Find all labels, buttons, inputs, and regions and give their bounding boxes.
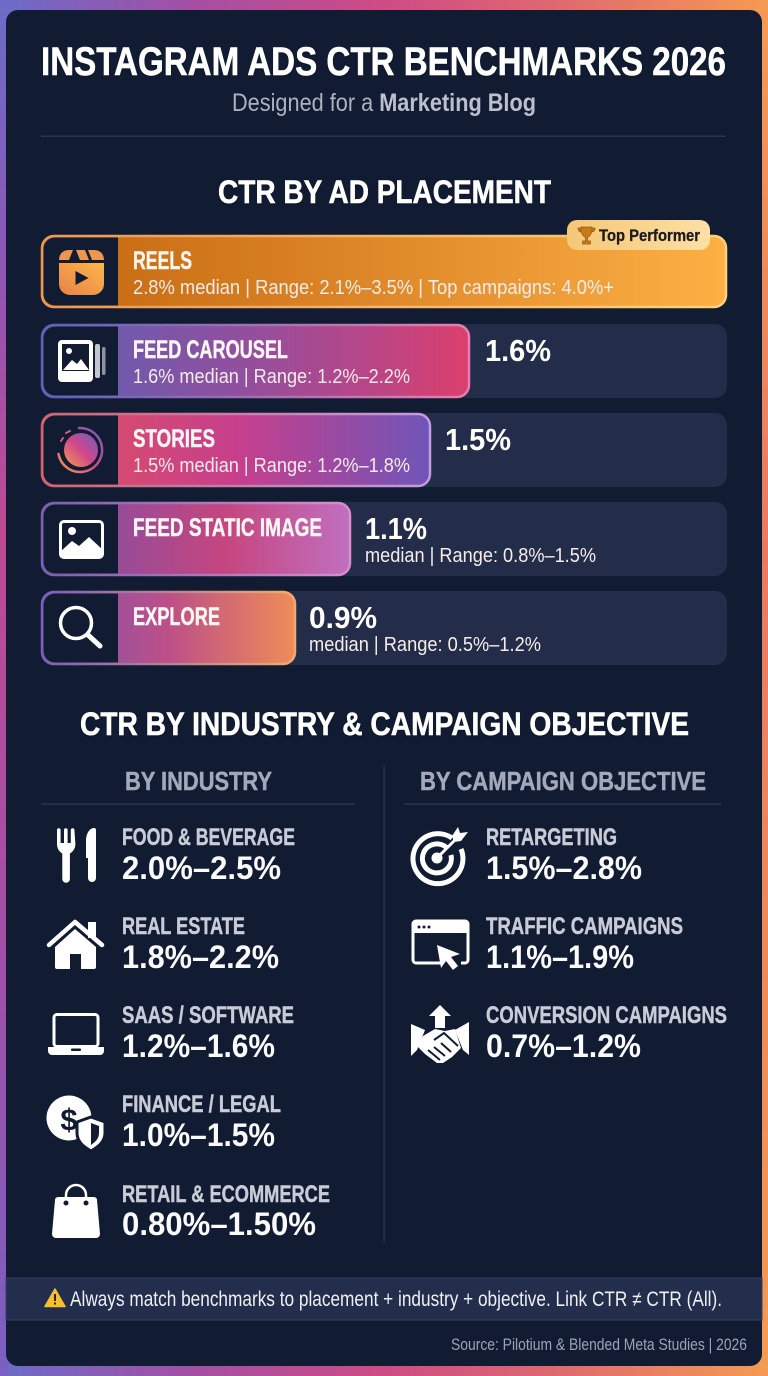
icon: carousel (44, 326, 118, 396)
value: 1.5%–2.8% (486, 850, 642, 886)
label: finance and legal: FINANCE / LEGAL (122, 1091, 281, 1118)
label: Feed Carousel: FEED CAROUSEL (133, 336, 288, 364)
detail: Feed Carousel: 1.6% median | Range: 1.2%–2.2% (133, 366, 410, 388)
value: 0.9%: 0.9% (309, 600, 377, 635)
icon: magnifier (44, 594, 118, 662)
item: retail and ecommerce (52, 1181, 330, 1242)
detail: Feed Static Image: median | Range: 0.8%–1.5% (365, 545, 596, 567)
label: Reels: REELS (133, 247, 192, 275)
label: Explore: EXPLORE (133, 603, 220, 631)
value: 1.0%–1.5% (122, 1117, 275, 1153)
panel: Reels bar (42, 236, 726, 307)
icon: fork and knife (57, 828, 96, 883)
item: real estate (49, 913, 279, 975)
detail: Reels: 2.8% median | Range: 2.1%–3.5% | Top campaigns: 4.0%+ (133, 277, 614, 299)
value: 0.7%–1.2% (486, 1028, 641, 1064)
label: food and beverage: FOOD & BEVERAGE (122, 824, 295, 851)
item: retargeting (413, 824, 642, 886)
value: 1.6%: 1.6% (485, 333, 551, 368)
item: SaaS and software (48, 1002, 294, 1064)
label: retargeting: RETARGETING (486, 824, 617, 851)
label: SaaS and software: SAAS / SOFTWARE (122, 1002, 294, 1029)
icon: trophy (578, 227, 595, 244)
icon: shopping bag (52, 1185, 100, 1238)
icon: dollar coin and shield: $ (60, 1102, 78, 1137)
detail: Explore: median | Range: 0.5%–1.2% (309, 634, 541, 656)
value: 1.1%–1.9% (486, 939, 634, 975)
icon: laptop (48, 1014, 104, 1055)
panel: Explore bar (41, 591, 727, 665)
icon: image (44, 504, 118, 574)
label: Feed Static Image: FEED STATIC IMAGE (133, 514, 322, 542)
detail: Stories: 1.5% median | Range: 1.2%–1.8% (133, 455, 410, 477)
icon: stories ring (44, 416, 118, 484)
item: food and beverage (57, 824, 295, 886)
value: 0.80%–1.50% (122, 1206, 316, 1242)
column heading: by campaign objective: BY CAMPAIGN OBJECTIVE (420, 766, 706, 796)
heading: CTR by industry and objective: CTR BY INDUSTRY & CAMPAIGN OBJECTIVE (80, 706, 689, 742)
column heading: by industry: BY INDUSTRY (125, 766, 272, 796)
item: finance and legal (46, 1091, 281, 1153)
label: top performer: Top Performer (599, 226, 700, 245)
value: 2.0%–2.5% (122, 850, 281, 886)
badge: top performer (567, 220, 710, 250)
value: 1.2%–1.6% (122, 1028, 275, 1064)
icon: house (49, 922, 102, 969)
value: 1.1%: 1.1% (365, 511, 427, 546)
icon: target with arrow (413, 827, 468, 884)
icon: reels clapper (44, 238, 118, 306)
icon: browser window with cursor (413, 921, 468, 970)
icon: warning triangle (45, 1289, 65, 1306)
label: retail and ecommerce: RETAIL & ECOMMERCE (122, 1181, 330, 1208)
subtitle: Designed for a Marketing Blog (232, 89, 536, 117)
label: real estate: REAL ESTATE (122, 913, 245, 940)
label: traffic campaigns: TRAFFIC CAMPAIGNS (486, 913, 683, 940)
label: Stories: STORIES (133, 425, 215, 453)
icon: handshake with arrow (411, 1005, 469, 1063)
panel: Stories bar (41, 413, 727, 487)
panel: Feed Static Image bar (41, 502, 727, 576)
panel: Feed Carousel bar (41, 324, 727, 398)
item: traffic campaigns (413, 913, 683, 975)
item: conversion campaigns (411, 1002, 727, 1064)
heading: CTR by ad placement: CTR BY AD PLACEMENT (218, 174, 551, 210)
icon: dollar coin and shield (46, 1096, 105, 1151)
value: 1.5%: 1.5% (445, 422, 511, 457)
value: 1.8%–2.2% (122, 939, 279, 975)
callout band (6, 1278, 762, 1320)
